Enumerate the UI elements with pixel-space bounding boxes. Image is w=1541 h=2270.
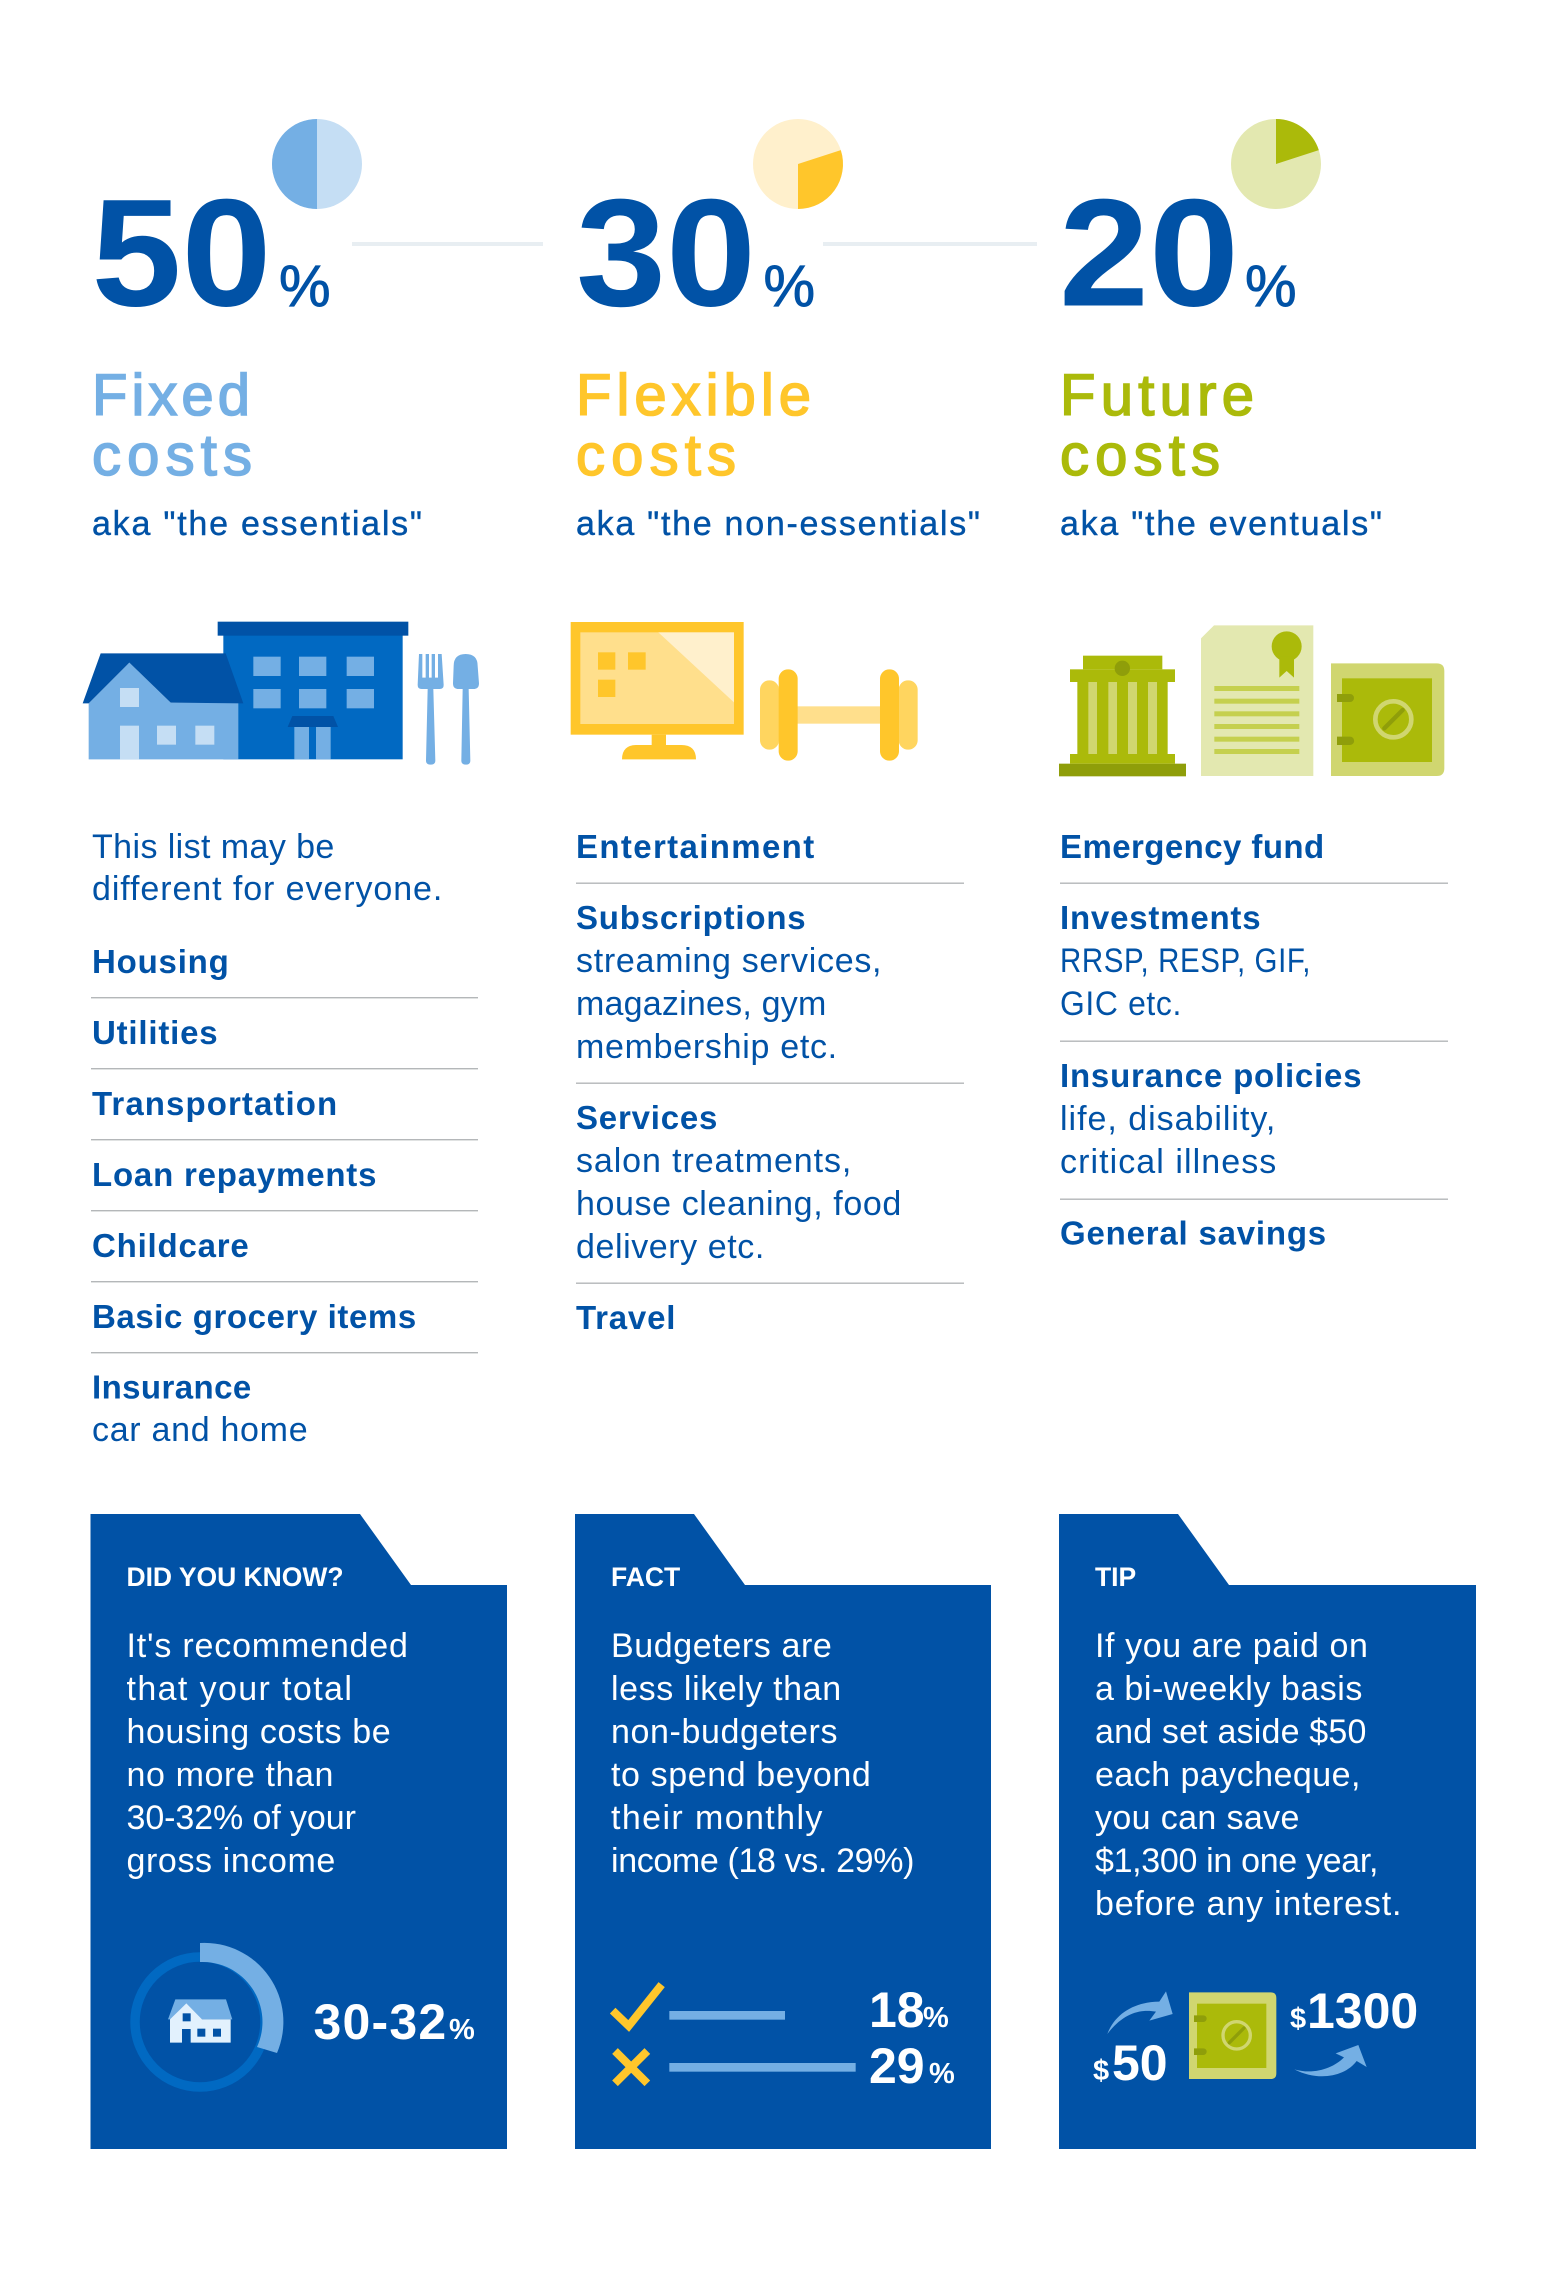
- heading: flexible costs: [576, 363, 811, 488]
- list item: transportation: Transportation: [92, 1085, 338, 1122]
- list item: insurance policies: life, disability,: [1060, 1100, 1276, 1138]
- list item: services: salon treatments,: [576, 1142, 852, 1180]
- subheading: the eventuals: aka "the eventuals": [1060, 505, 1382, 543]
- panel: flexible costs list: [576, 828, 964, 1336]
- card body text: 30-32% of your: [126, 1799, 356, 1837]
- card body text: less likely than: [611, 1670, 842, 1708]
- big number 20%: 20: [1059, 168, 1239, 338]
- list item: utilities: Utilities: [92, 1014, 218, 1051]
- card body text: you can save: [1095, 1799, 1300, 1837]
- list item: emergency fund: Emergency fund: [1060, 828, 1325, 865]
- intro text: different for everyone.: [92, 870, 443, 908]
- list item: subscriptions: streaming services,: [576, 942, 882, 980]
- card body text: housing costs be: [126, 1713, 391, 1751]
- connector line between 30 and 20: [823, 242, 1037, 246]
- card body text: before any interest.: [1095, 1885, 1402, 1923]
- card body text: a bi-weekly basis: [1095, 1670, 1363, 1708]
- panel: did you know card: [90, 1514, 507, 2149]
- card body text: that your total: [126, 1670, 352, 1708]
- card label: FACT: [611, 1562, 680, 1592]
- list item: loan repayments: Loan repayments: [92, 1156, 377, 1193]
- list item: insurance policies: Insurance policies: [1060, 1057, 1362, 1094]
- icon: 30 percent pie: [753, 119, 843, 209]
- panel: fixed costs list: [91, 828, 478, 1449]
- card body text: and set aside $50: [1095, 1713, 1367, 1751]
- card body text: gross income: [126, 1842, 336, 1880]
- card background: [575, 1514, 991, 2149]
- subheading: the essentials: aka "the essentials": [92, 505, 422, 543]
- big number 50%: 50: [92, 168, 272, 338]
- donut chart with house icon: [135, 1943, 283, 2087]
- stat: $1300: 1300: [1307, 1983, 1418, 2039]
- list item: housing: Housing: [92, 943, 230, 980]
- icon: 50 percent pie: [272, 119, 362, 209]
- list item: services: Services: [576, 1099, 718, 1136]
- list item: insurance: car and home: [92, 1411, 308, 1449]
- list item: services: delivery etc.: [576, 1228, 765, 1266]
- card body text: [126, 1627, 408, 1880]
- card body text: If you are paid on: [1095, 1627, 1369, 1665]
- stat: 29%: [869, 2038, 955, 2094]
- heading: flexible costs: Flexible: [576, 363, 811, 428]
- card body text: each paycheque,: [1095, 1756, 1361, 1794]
- list item: insurance: [92, 1368, 308, 1449]
- card body text: $1,300 in one year,: [1095, 1842, 1379, 1880]
- list item: subscriptions: Subscriptions: [576, 899, 806, 936]
- card label: DID YOU KNOW?: [126, 1562, 344, 1592]
- card body text: to spend beyond: [611, 1756, 871, 1794]
- card body text: income (18 vs. 29%): [611, 1842, 915, 1880]
- list item: services: [576, 1099, 902, 1266]
- stat: 18%: 18: [869, 1982, 925, 2038]
- stat: 18%: %: [923, 2002, 949, 2034]
- heading: future costs: Future: [1060, 363, 1254, 428]
- card body text: [1095, 1627, 1402, 1923]
- icon: safe with savings arrows: [1107, 1991, 1367, 2079]
- heading: future costs: costs: [1060, 423, 1220, 488]
- list item: subscriptions: membership etc.: [576, 1028, 838, 1066]
- card body text: non-budgeters: [611, 1713, 838, 1751]
- big number 50%: %: [279, 254, 331, 319]
- stat: 29%: %: [929, 2058, 955, 2090]
- list item: basic grocery items: Basic grocery items: [92, 1298, 417, 1335]
- list item: investments: RRSP, RESP, GIF,: [1060, 942, 1311, 980]
- bar chart: budgeters vs non-budgeters: [613, 1985, 856, 2083]
- list item: investments: GIC etc.: [1060, 985, 1182, 1023]
- panel: tip card: [1059, 1514, 1476, 2149]
- big number 30%: %: [764, 254, 815, 319]
- card body text: no more than: [126, 1756, 334, 1794]
- stat: 29%: 29: [869, 2038, 925, 2094]
- card label: TIP: [1095, 1562, 1136, 1592]
- list item: travel: Travel: [576, 1299, 676, 1336]
- heading: fixed costs: costs: [92, 423, 252, 488]
- panel: fact card: [575, 1514, 991, 2149]
- list item: investments: Investments: [1060, 899, 1261, 936]
- list item: insurance policies: critical illness: [1060, 1143, 1277, 1181]
- list item: subscriptions: magazines, gym: [576, 985, 827, 1023]
- big number 30%: 30: [576, 168, 756, 338]
- card background: [1059, 1514, 1476, 2149]
- heading: fixed costs: [92, 363, 252, 488]
- card body text: Budgeters are: [611, 1627, 832, 1665]
- list item: services: house cleaning, food: [576, 1185, 902, 1223]
- icon: house, apartment building, fork and spoon: [83, 622, 479, 765]
- heading: future costs: [1060, 363, 1254, 488]
- icon: 20 percent pie: [1231, 119, 1321, 209]
- heading: flexible costs: costs: [576, 423, 736, 488]
- panel: future costs list: [1060, 828, 1448, 1252]
- stat: 18%: [869, 1982, 949, 2038]
- intro text: [92, 828, 443, 908]
- connector line between 50 and 30: [352, 242, 543, 246]
- panel: flexible costs header: [576, 119, 980, 543]
- list item: entertainment: Entertainment: [576, 828, 815, 865]
- card background: [90, 1514, 507, 2149]
- stat: 30-32%: %: [449, 2014, 475, 2046]
- card body text: their monthly: [611, 1799, 823, 1837]
- card body text: [611, 1627, 915, 1880]
- big number 20%: %: [1245, 254, 1297, 319]
- panel: future costs header: [1059, 119, 1382, 543]
- intro text: This list may be: [92, 828, 335, 866]
- icon: bank, certificate and safe: [1059, 625, 1444, 776]
- list item: insurance policies: [1060, 1057, 1362, 1181]
- stat: $1300: $: [1290, 2003, 1306, 2035]
- list item: investments: [1060, 899, 1311, 1023]
- subheading: the non-essentials: aka "the non-essentials": [576, 505, 980, 543]
- stat: $50: $: [1093, 2055, 1109, 2087]
- stat: 30-32%: 30-32: [314, 1994, 447, 2050]
- icon: monitor and dumbbell: [571, 622, 918, 761]
- card body text: It's recommended: [126, 1627, 408, 1665]
- list item: general savings: General savings: [1060, 1214, 1327, 1252]
- list item: childcare: Childcare: [92, 1227, 250, 1264]
- list item: insurance: Insurance: [92, 1368, 252, 1406]
- list item: subscriptions: [576, 899, 882, 1066]
- stat: $50: 50: [1112, 2035, 1168, 2091]
- heading: fixed costs: Fixed: [92, 363, 250, 428]
- panel: fixed costs header: [92, 119, 422, 543]
